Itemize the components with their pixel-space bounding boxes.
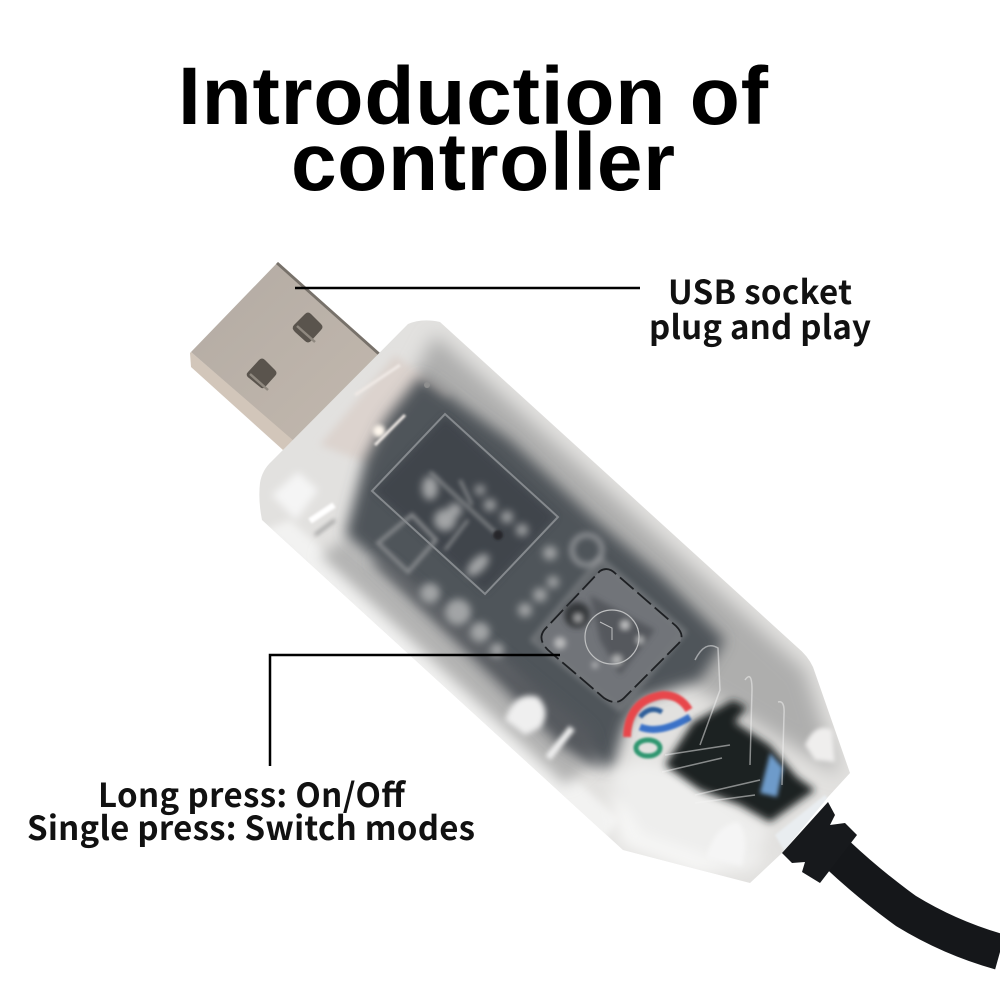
callout: button: Single press: Switch modes <box>27 802 475 850</box>
button <box>532 558 685 710</box>
title: Introduction of <box>178 51 769 142</box>
chip outline <box>372 414 558 594</box>
lower clear section <box>610 764 764 850</box>
board components <box>420 476 559 657</box>
controller translucent body <box>27 266 1000 952</box>
screw posts <box>505 696 546 735</box>
ribs <box>662 646 784 803</box>
icon: USB contact holes <box>247 312 322 390</box>
neck highlight <box>776 796 827 850</box>
USB plug <box>190 262 380 450</box>
shading: lower edge band <box>265 520 620 845</box>
cable <box>782 802 1000 952</box>
USB logo ghost <box>378 472 497 572</box>
halo ring on board <box>572 535 602 565</box>
shading: tinted plug end <box>324 358 449 460</box>
light reflections <box>373 425 385 437</box>
callout: USB socket: plug and play <box>649 301 871 349</box>
callout: button: Long press: On/Off <box>98 769 406 817</box>
callout: USB socket <box>295 266 871 349</box>
title: controller <box>291 117 675 208</box>
wires <box>627 695 690 756</box>
callout: USB socket: USB socket <box>668 266 852 314</box>
callout: button <box>27 655 560 850</box>
circuit board <box>345 375 725 770</box>
internal cable <box>665 700 815 822</box>
title <box>178 51 769 208</box>
shading: upper band <box>400 335 840 775</box>
